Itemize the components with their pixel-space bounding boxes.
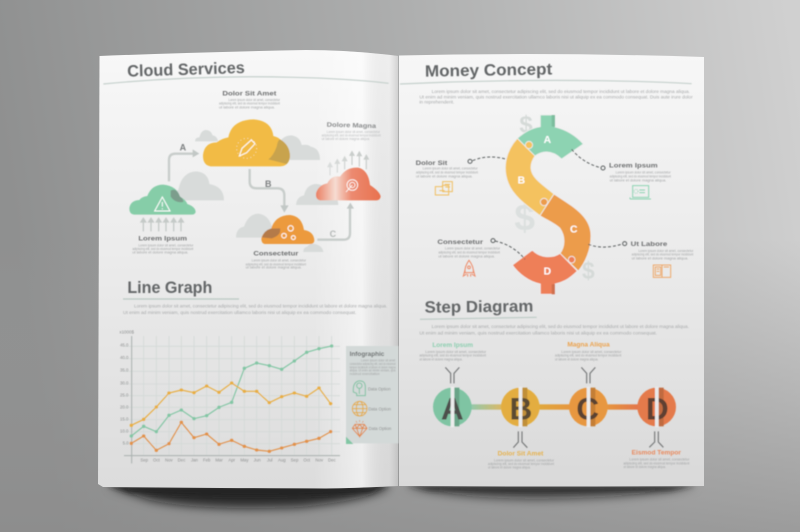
step c: [569, 387, 608, 427]
text block: eismod tempor: Eismod Tempor: [632, 451, 682, 457]
heading rule: [400, 80, 692, 84]
series: orange: [130, 421, 332, 453]
legend text: consectetur adipiscing elit, sed do eiusmod: [350, 362, 396, 366]
text block: consectetur: [246, 251, 307, 270]
axis labels: Mar: [215, 457, 223, 462]
icon: diamond: [352, 420, 367, 437]
dollar puzzle: [505, 115, 591, 294]
intro text: [419, 324, 689, 335]
text block: dolor sit amet: Dolor Sit Amet: [498, 451, 543, 457]
icon: pencil: [237, 138, 257, 158]
axis labels: Apr: [228, 457, 236, 462]
axis labels: Dec: [178, 457, 186, 462]
icon: laptop: [630, 186, 651, 199]
text block: dolor sit amet: adipiscing elit, sed do eiusmod tempor incididunt: [219, 102, 280, 106]
cloud: red: [316, 168, 381, 200]
text block: eismod tempor: [623, 451, 690, 469]
legend text: Lorem ipsum dolor sit amet: [361, 359, 395, 363]
axis labels: 30.0: [120, 380, 129, 385]
text block: dolore magna: [322, 122, 381, 141]
icon: warning triangle: [155, 197, 170, 211]
connector letters: A: [180, 142, 187, 152]
legend text: nostrud exercitation: [350, 372, 380, 376]
puzzle piece d: D: [544, 266, 552, 277]
connector bars: [470, 404, 640, 410]
axis labels: Jun: [254, 457, 261, 462]
axis labels: Oct: [153, 457, 161, 462]
intro text: Lorem ipsum dolor sit amet, consectetur adipiscing elit, sed do eiusmod tempor incididunt ut labore et dolore magna aliqua.: [432, 324, 689, 329]
text block: dolor sit amet: adipiscing elit, sed do eiusmod tempor incididunt: [488, 462, 554, 466]
text block: magna aliqua: adipiscing elit, sed do eiusmod tempor incididunt: [555, 354, 621, 358]
left page: [98, 50, 398, 488]
puzzle piece b: [505, 138, 554, 216]
upward arrows under green cloud: [141, 218, 183, 231]
axis labels: Jan: [191, 457, 199, 462]
step b: [501, 387, 540, 427]
text block: lorem ipsum: ut labore et dolore magna aliqua.: [419, 357, 463, 361]
text block: eismod tempor: ut labore et dolore magna aliqua.: [623, 465, 666, 469]
connector arrow c: [317, 203, 354, 240]
gray background clouds: [172, 130, 338, 252]
label: data option 2: Data Option: [368, 406, 392, 411]
series: green: [130, 344, 333, 438]
connector arrow a: [169, 149, 199, 181]
text block: lorem ipsum: Lorem Ipsum: [432, 343, 473, 349]
text block: magna aliqua: Lorem ipsum dolor sit amet, consectetur: [561, 350, 622, 354]
label: data option 1: Data Option: [368, 387, 391, 392]
axis labels: 20.0: [120, 404, 129, 409]
text block: consectetur: adipiscing elit, sed do eiusmod tempor incididunt: [438, 250, 500, 254]
step a: [433, 387, 472, 427]
text block: dolore magna: Lorem ipsum dolor sit amet, consectetur: [327, 130, 381, 134]
step d: D: [646, 390, 669, 426]
decorative gray dollar signs: $: [519, 111, 533, 138]
text block: lorem ipsum: Lorem Ipsum: [609, 162, 658, 169]
y-shaped connectors: [445, 367, 663, 448]
step b: B: [510, 390, 532, 426]
dashed connectors: [468, 149, 627, 259]
intro text: Ut enim ad minim veniam, quis nostrud exercitation ullamco laboris nisi ut aliquip ex ea commodo consequat.: [419, 330, 657, 335]
icon: rocket: [463, 260, 475, 277]
decorative gray dollar signs: $: [514, 196, 535, 238]
decorative gray dollar signs: $: [582, 257, 595, 284]
axis labels: Dec: [328, 457, 337, 462]
intro text: Lorem ipsum dolor sit amet, consectetur adipiscing elit, sed do eiusmod tempor incididunt ut labore et dolore magna aliqua.: [432, 89, 690, 94]
text block: ut labore: [631, 241, 694, 261]
cloud: yellow: [203, 119, 290, 166]
step a: A: [441, 390, 464, 426]
puzzle piece a: [517, 115, 583, 159]
text block: dolor sit amet: [488, 451, 555, 470]
text block: lorem ipsum: adipiscing elit, sed do eiusmod tempor incididunt: [419, 354, 486, 358]
text block: lorem ipsum: ut labore et dolore magna aliqua.: [132, 250, 188, 254]
heading rule: [420, 317, 537, 319]
text block: ut labore: Lorem ipsum dolor sit amet, consectetur: [638, 249, 694, 253]
line chart: [119, 330, 340, 463]
legend text: aliqua. Ut enim ad minim veniam, quis: [350, 369, 396, 373]
text block: dolor sit amet: [219, 90, 281, 109]
text block: eismod tempor: Lorem ipsum dolor sit amet, consectetur: [629, 458, 690, 462]
text block: lorem ipsum: [132, 236, 194, 254]
connector letters: C: [330, 229, 337, 239]
panel: cloud services: [103, 59, 389, 270]
heading: line graph: Line Graph: [127, 279, 212, 297]
text block: consectetur: ut labore et dolore magna aliqua.: [246, 266, 302, 270]
text block: consectetur: Lorem ipsum dolor sit amet, consectetur: [252, 259, 307, 263]
text block: dolor sit: Dolor Sit: [416, 160, 448, 167]
icon: open book: [653, 265, 671, 277]
icon: head with magnifier: [353, 381, 365, 396]
connector letters: B: [265, 179, 272, 189]
intro text: Ut enim ad minim veniam, quis nostrud exercitation ullamco laboris nisi ut aliquip ex ea commodo consequat.: [123, 310, 356, 315]
text block: lorem ipsum: Lorem Ipsum: [138, 236, 187, 243]
text block: ut labore: adipiscing elit, sed do eiusmod tempor incididunt: [632, 253, 693, 257]
panel: money concept: [400, 60, 694, 294]
puzzle piece d: [512, 250, 577, 294]
text block: lorem ipsum: Lorem ipsum dolor sit amet, consectetur: [138, 244, 194, 248]
axis labels: 40.0: [120, 355, 129, 360]
text block: ut labore: Ut Labore: [631, 241, 668, 248]
text block: dolor sit: ut labore et dolore magna aliqua.: [416, 175, 473, 179]
icon: gears: [282, 226, 295, 240]
axis labels: Feb: [203, 457, 211, 462]
icon: folders: [435, 182, 452, 195]
decorative gray dollar signs: [514, 111, 595, 284]
text block: eismod tempor: adipiscing elit, sed do eiusmod tempor incididunt: [623, 461, 689, 465]
text block: consectetur: Consectetur: [253, 251, 299, 258]
text block: lorem ipsum: ut labore et dolore magna aliqua.: [610, 178, 666, 182]
text block: magna aliqua: ut labore et dolore magna aliqua.: [555, 357, 598, 361]
connector arrow b: [250, 169, 289, 213]
text block: consectetur: Consectetur: [437, 239, 484, 246]
axis labels: 15.0: [120, 416, 129, 421]
axis labels: Sep: [291, 457, 299, 462]
panel: infographic legend: [346, 346, 398, 444]
text block: dolor sit amet: ut labore et dolore magna aliqua.: [219, 105, 275, 109]
text block: dolore magna: adipiscing elit, sed do eiusmod tempor incididunt: [322, 133, 381, 137]
legend text: [350, 359, 396, 376]
panel: step diagram: [419, 298, 690, 470]
text block: dolor sit amet: Lorem ipsum dolor sit amet, consectetur: [228, 98, 281, 102]
text block: lorem ipsum: [419, 343, 487, 361]
text block: magna aliqua: [555, 343, 622, 361]
puzzle piece c: [540, 194, 591, 271]
axis labels: Nov: [315, 457, 324, 462]
intro text: [419, 89, 693, 105]
cloud: green: [129, 185, 196, 215]
text block: consectetur: [437, 239, 501, 258]
text block: consectetur: adipiscing elit, sed do eiusmod tempor incididunt: [246, 262, 306, 266]
heading: cloud services: Cloud Services: [127, 59, 245, 81]
text block: lorem ipsum: Lorem ipsum dolor sit amet, consectetur: [425, 350, 487, 354]
axis labels: 5.0: [123, 440, 129, 445]
text block: dolore magna: ut labore et dolore magna aliqua.: [322, 137, 370, 141]
text block: dolor sit amet: ut labore et dolore magna aliqua.: [488, 466, 531, 470]
heading: money concept: Money Concept: [425, 60, 553, 81]
label: data option 3: Data Option: [369, 426, 392, 431]
icon: globe: [352, 401, 367, 416]
step d: [637, 387, 676, 427]
axis labels: Jul: [267, 457, 273, 462]
text block: lorem ipsum: adipiscing elit, sed do eiusmod tempor incididunt: [132, 247, 193, 251]
text block: lorem ipsum: [609, 162, 671, 182]
axis labels: Oct: [303, 457, 311, 462]
axis labels: Sep: [140, 457, 149, 462]
icon: target: [346, 180, 358, 192]
legend text: tempor incididunt ut labore et dolore magna: [350, 365, 396, 369]
text block: dolor sit: Lorem ipsum dolor sit amet, consectetur: [423, 167, 478, 171]
text block: consectetur: Lorem ipsum dolor sit amet, consectetur: [445, 246, 501, 250]
panel: line graph: [119, 279, 398, 463]
axis labels: May: [240, 457, 249, 462]
text block: ut labore: ut labore et dolore magna aliqua.: [632, 257, 688, 261]
heading rule: [103, 77, 389, 84]
text block: dolor sit amet: Lorem ipsum dolor sit amet, consectetur: [494, 458, 555, 462]
axis labels: x1000$: [119, 330, 135, 335]
text block: magna aliqua: Magna Aliqua: [567, 343, 610, 349]
intro text: [123, 304, 387, 315]
heading: step diagram: Step Diagram: [425, 298, 533, 317]
axis labels: 45.0: [120, 342, 129, 347]
axis labels: [119, 330, 337, 462]
puzzle piece c: C: [570, 224, 578, 235]
right page: [399, 54, 704, 486]
intro text: Ut enim ad minim veniam, quis nostrud exercitation ullamco laboris nisi ut aliquip ex ea commodo consequat. Duis aute irure dolor: [419, 95, 693, 100]
text block: dolor sit: [416, 160, 478, 179]
text block: consectetur: ut labore et dolore magna aliqua.: [438, 254, 495, 258]
axis labels: 25.0: [120, 392, 129, 397]
text block: dolor sit: adipiscing elit, sed do eiusmod tempor incididunt: [416, 171, 478, 175]
intro text: Lorem ipsum dolor sit amet, consectetur adipiscing elit, sed do eiusmod tempor incididunt ut labore et dolore magna aliqua.: [134, 304, 387, 309]
axis labels: Nov: [165, 457, 174, 462]
axis labels: Aug: [278, 457, 286, 462]
series: yellow: [130, 381, 332, 427]
text block: dolor sit amet: Dolor Sit Amet: [222, 90, 277, 97]
axis labels: 35.0: [120, 368, 129, 373]
cloud: orange: [261, 215, 314, 244]
legend heading: Infographic: [350, 352, 385, 358]
upward arrows above red cloud: [328, 152, 368, 175]
text block: lorem ipsum: Lorem ipsum dolor sit amet, consectetur: [616, 171, 671, 175]
text block: dolore magna: Dolore Magna: [327, 122, 377, 130]
connector letters: [180, 142, 337, 239]
puzzle piece b: B: [518, 176, 525, 187]
book shadow: [106, 486, 698, 508]
heading rule: [123, 298, 239, 300]
puzzle piece a: A: [544, 135, 552, 146]
step c: C: [576, 390, 599, 426]
intro text: in reprehenderit.: [419, 100, 454, 105]
axis labels: 10.0: [120, 428, 129, 433]
text block: lorem ipsum: adipiscing elit, sed do eiusmod tempor incididunt: [610, 174, 671, 178]
